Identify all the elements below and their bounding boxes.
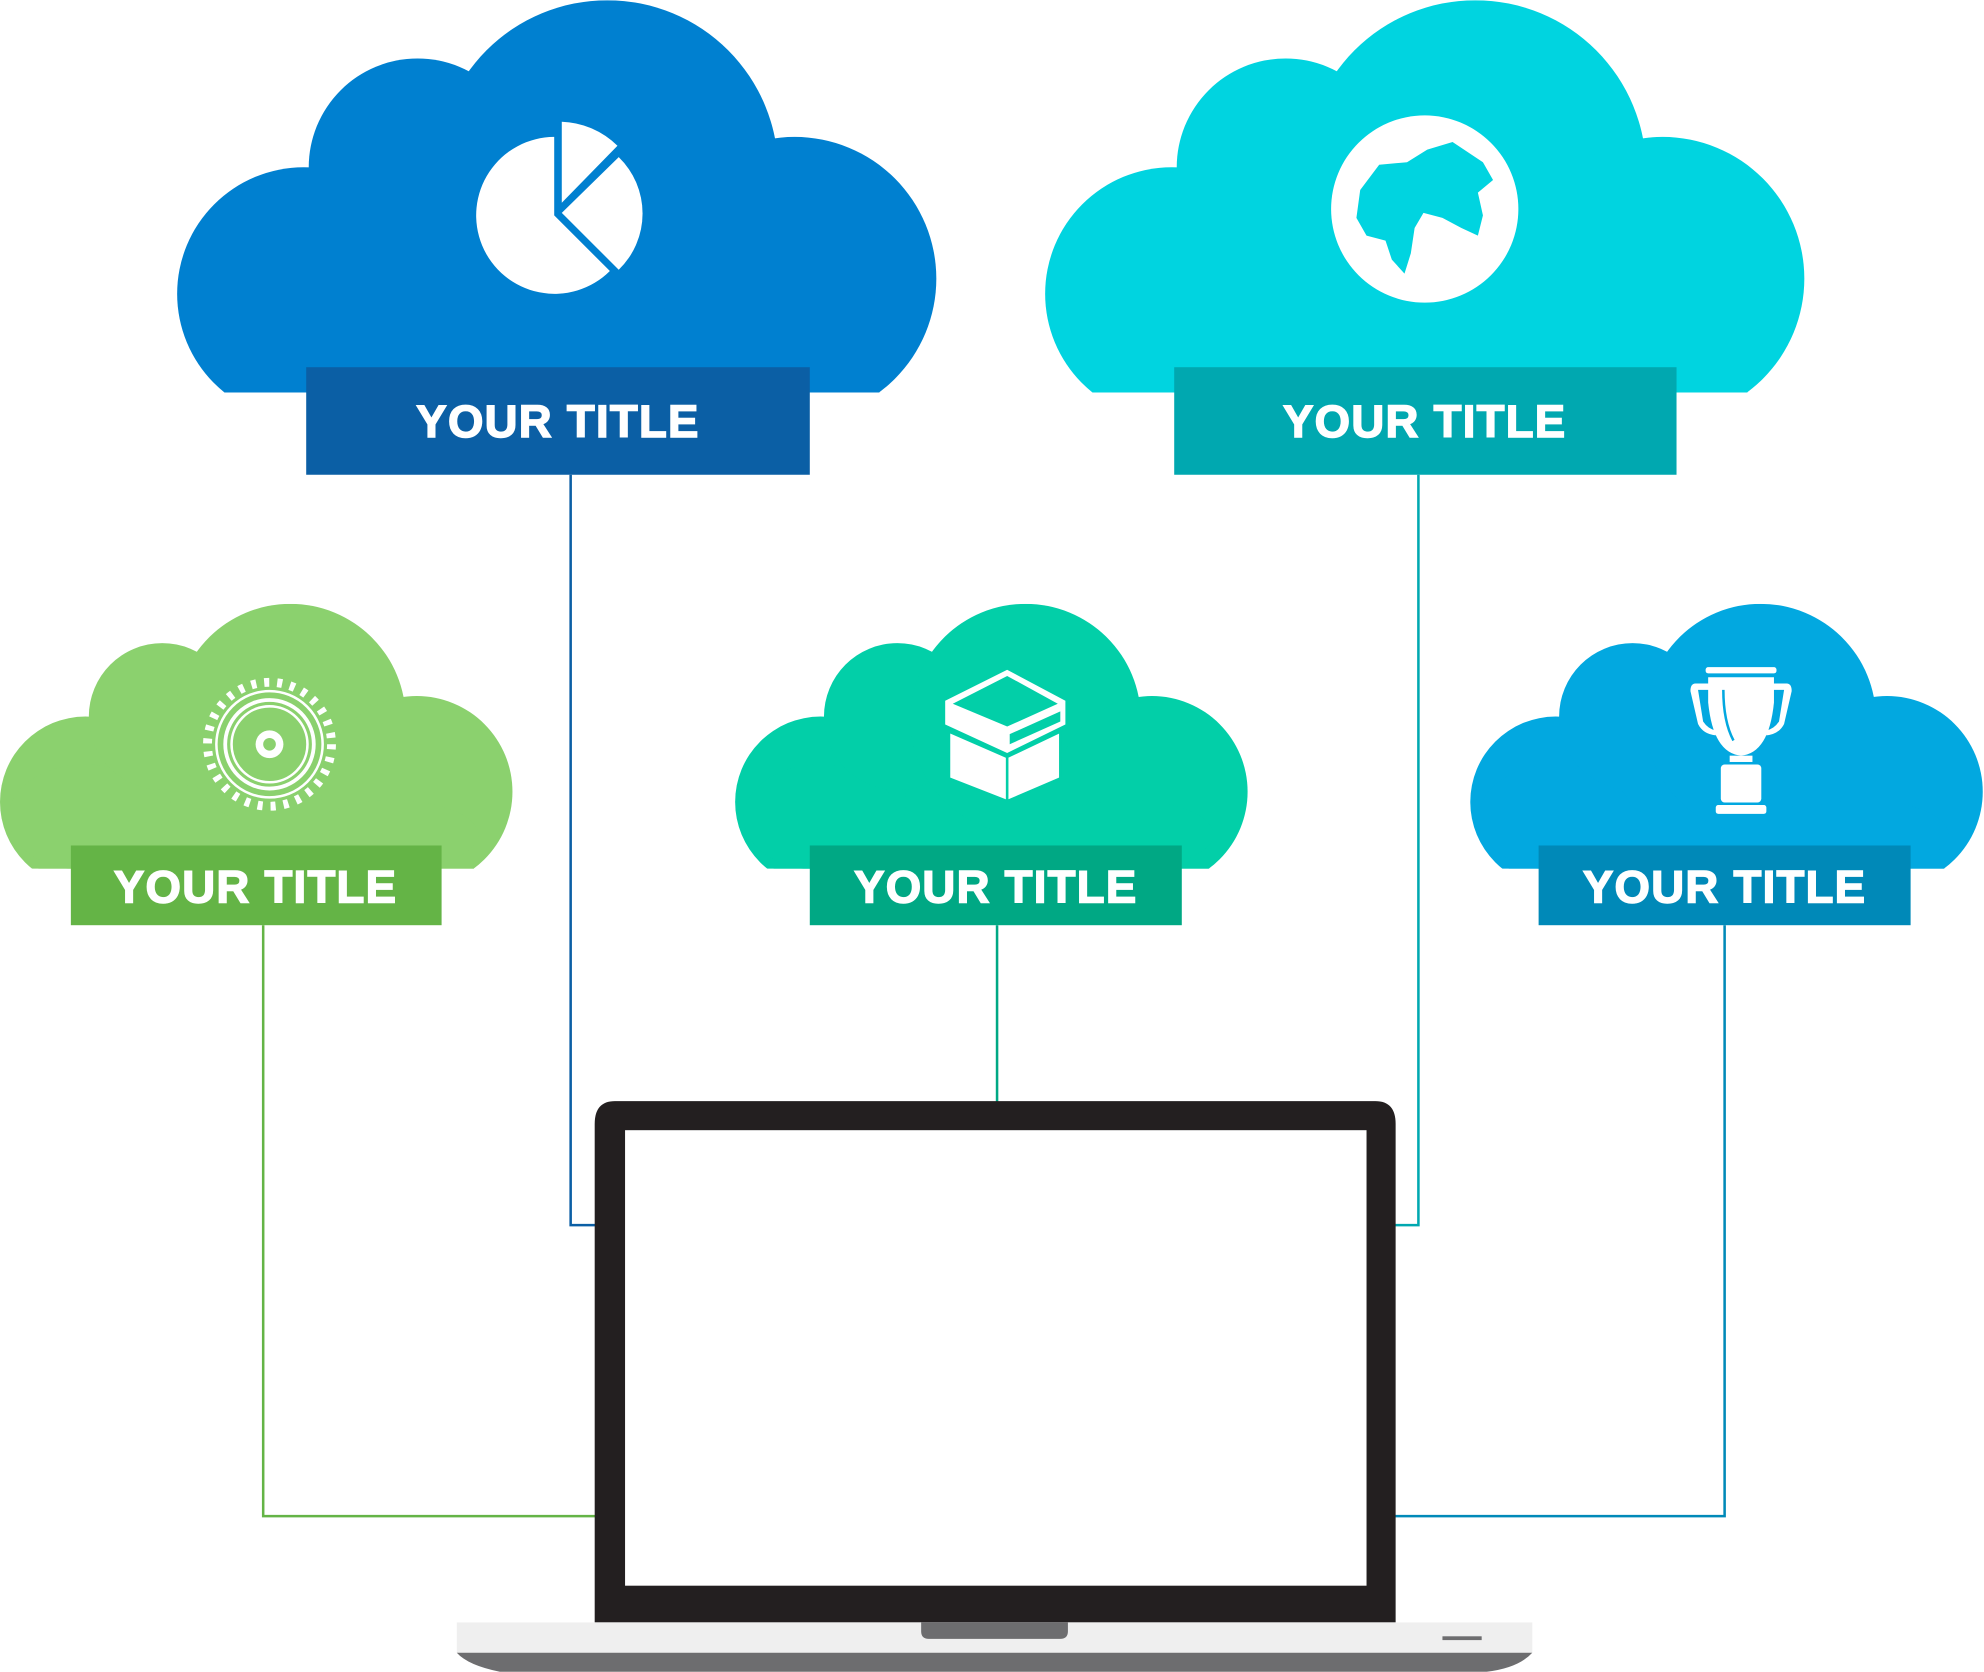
icon: box <box>944 668 1067 801</box>
cloud: blue trophy <box>1470 604 1983 925</box>
icon: trophy <box>1690 667 1792 814</box>
laptop <box>457 1101 1532 1672</box>
connector lines <box>263 475 1725 1516</box>
cloud: teal box <box>735 604 1248 925</box>
label box: YOUR TITLE <box>1283 396 1566 447</box>
icon: pie chart <box>476 122 643 294</box>
label box: YOUR TITLE <box>114 861 397 912</box>
label box: YOUR TITLE <box>1583 861 1866 912</box>
cloud: top-left chart <box>177 0 936 475</box>
icon: gear <box>208 682 332 806</box>
label box: YOUR TITLE <box>416 396 700 447</box>
label box <box>71 845 442 925</box>
label box <box>810 845 1182 925</box>
label box: YOUR TITLE <box>854 861 1137 912</box>
label box <box>1174 367 1677 475</box>
cloud: top-right globe <box>1045 0 1804 475</box>
icon: globe <box>1331 115 1518 303</box>
label box <box>1539 845 1911 925</box>
cloud: green gear <box>0 604 512 925</box>
screen <box>625 1130 1367 1586</box>
laptop base <box>457 1622 1532 1653</box>
label box <box>306 367 810 475</box>
